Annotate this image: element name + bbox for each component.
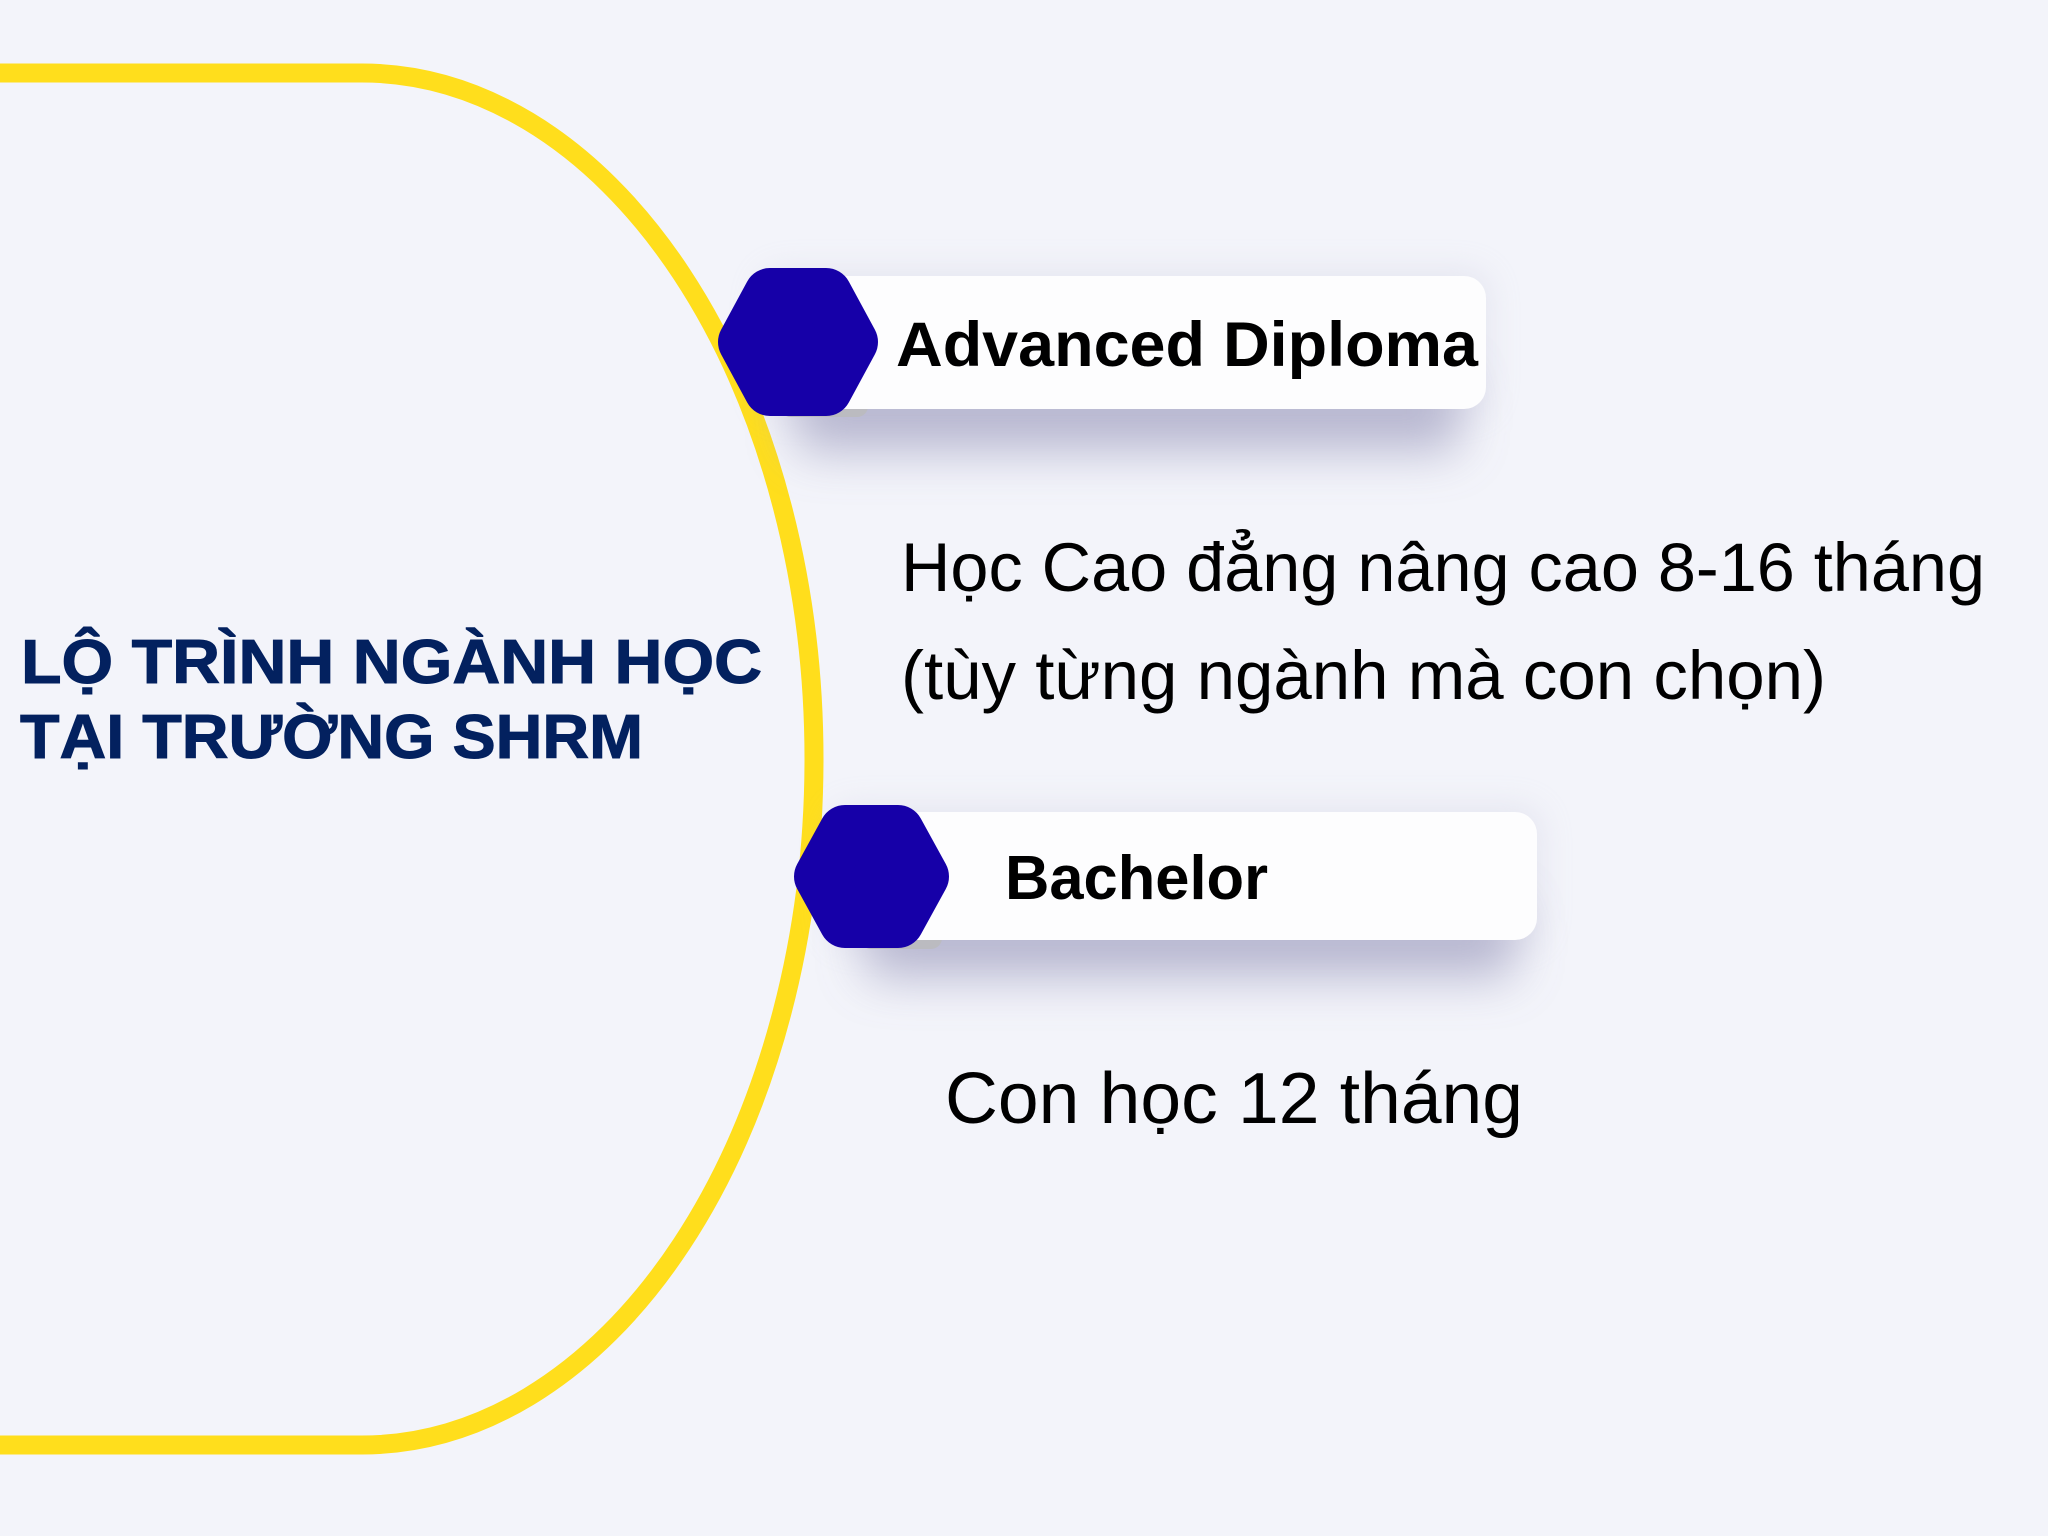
text block: Advanced Diploma description <box>901 529 1985 714</box>
title: TẠI TRƯỜNG SHRM <box>20 703 643 772</box>
panel: Bachelor <box>820 806 1542 978</box>
text block: Bachelor description: Con học 12 tháng <box>945 1059 1523 1139</box>
icon: hexagon <box>820 831 923 922</box>
text block: Advanced Diploma description: (tùy từng ngành mà con chọn) <box>901 637 1826 714</box>
card label: Advanced Diploma <box>896 310 1479 380</box>
card sliver under hexagon <box>780 396 868 417</box>
card halo <box>760 270 1490 415</box>
card halo <box>830 806 1542 946</box>
card <box>880 812 1537 940</box>
yellow arch outline <box>0 73 814 1445</box>
card <box>800 276 1486 409</box>
title: LỘ TRÌNH NGÀNH HỌC <box>21 628 762 697</box>
card label: Bachelor <box>1005 844 1268 913</box>
icon: hexagon <box>744 294 852 390</box>
text block: Advanced Diploma description: Học Cao đẳng nâng cao 8-16 tháng <box>901 529 1985 606</box>
panel: Advanced Diploma <box>744 270 1490 452</box>
card sliver under hexagon <box>860 925 942 949</box>
card shadow <box>795 370 1460 452</box>
card shadow <box>865 900 1515 978</box>
title <box>20 628 762 772</box>
